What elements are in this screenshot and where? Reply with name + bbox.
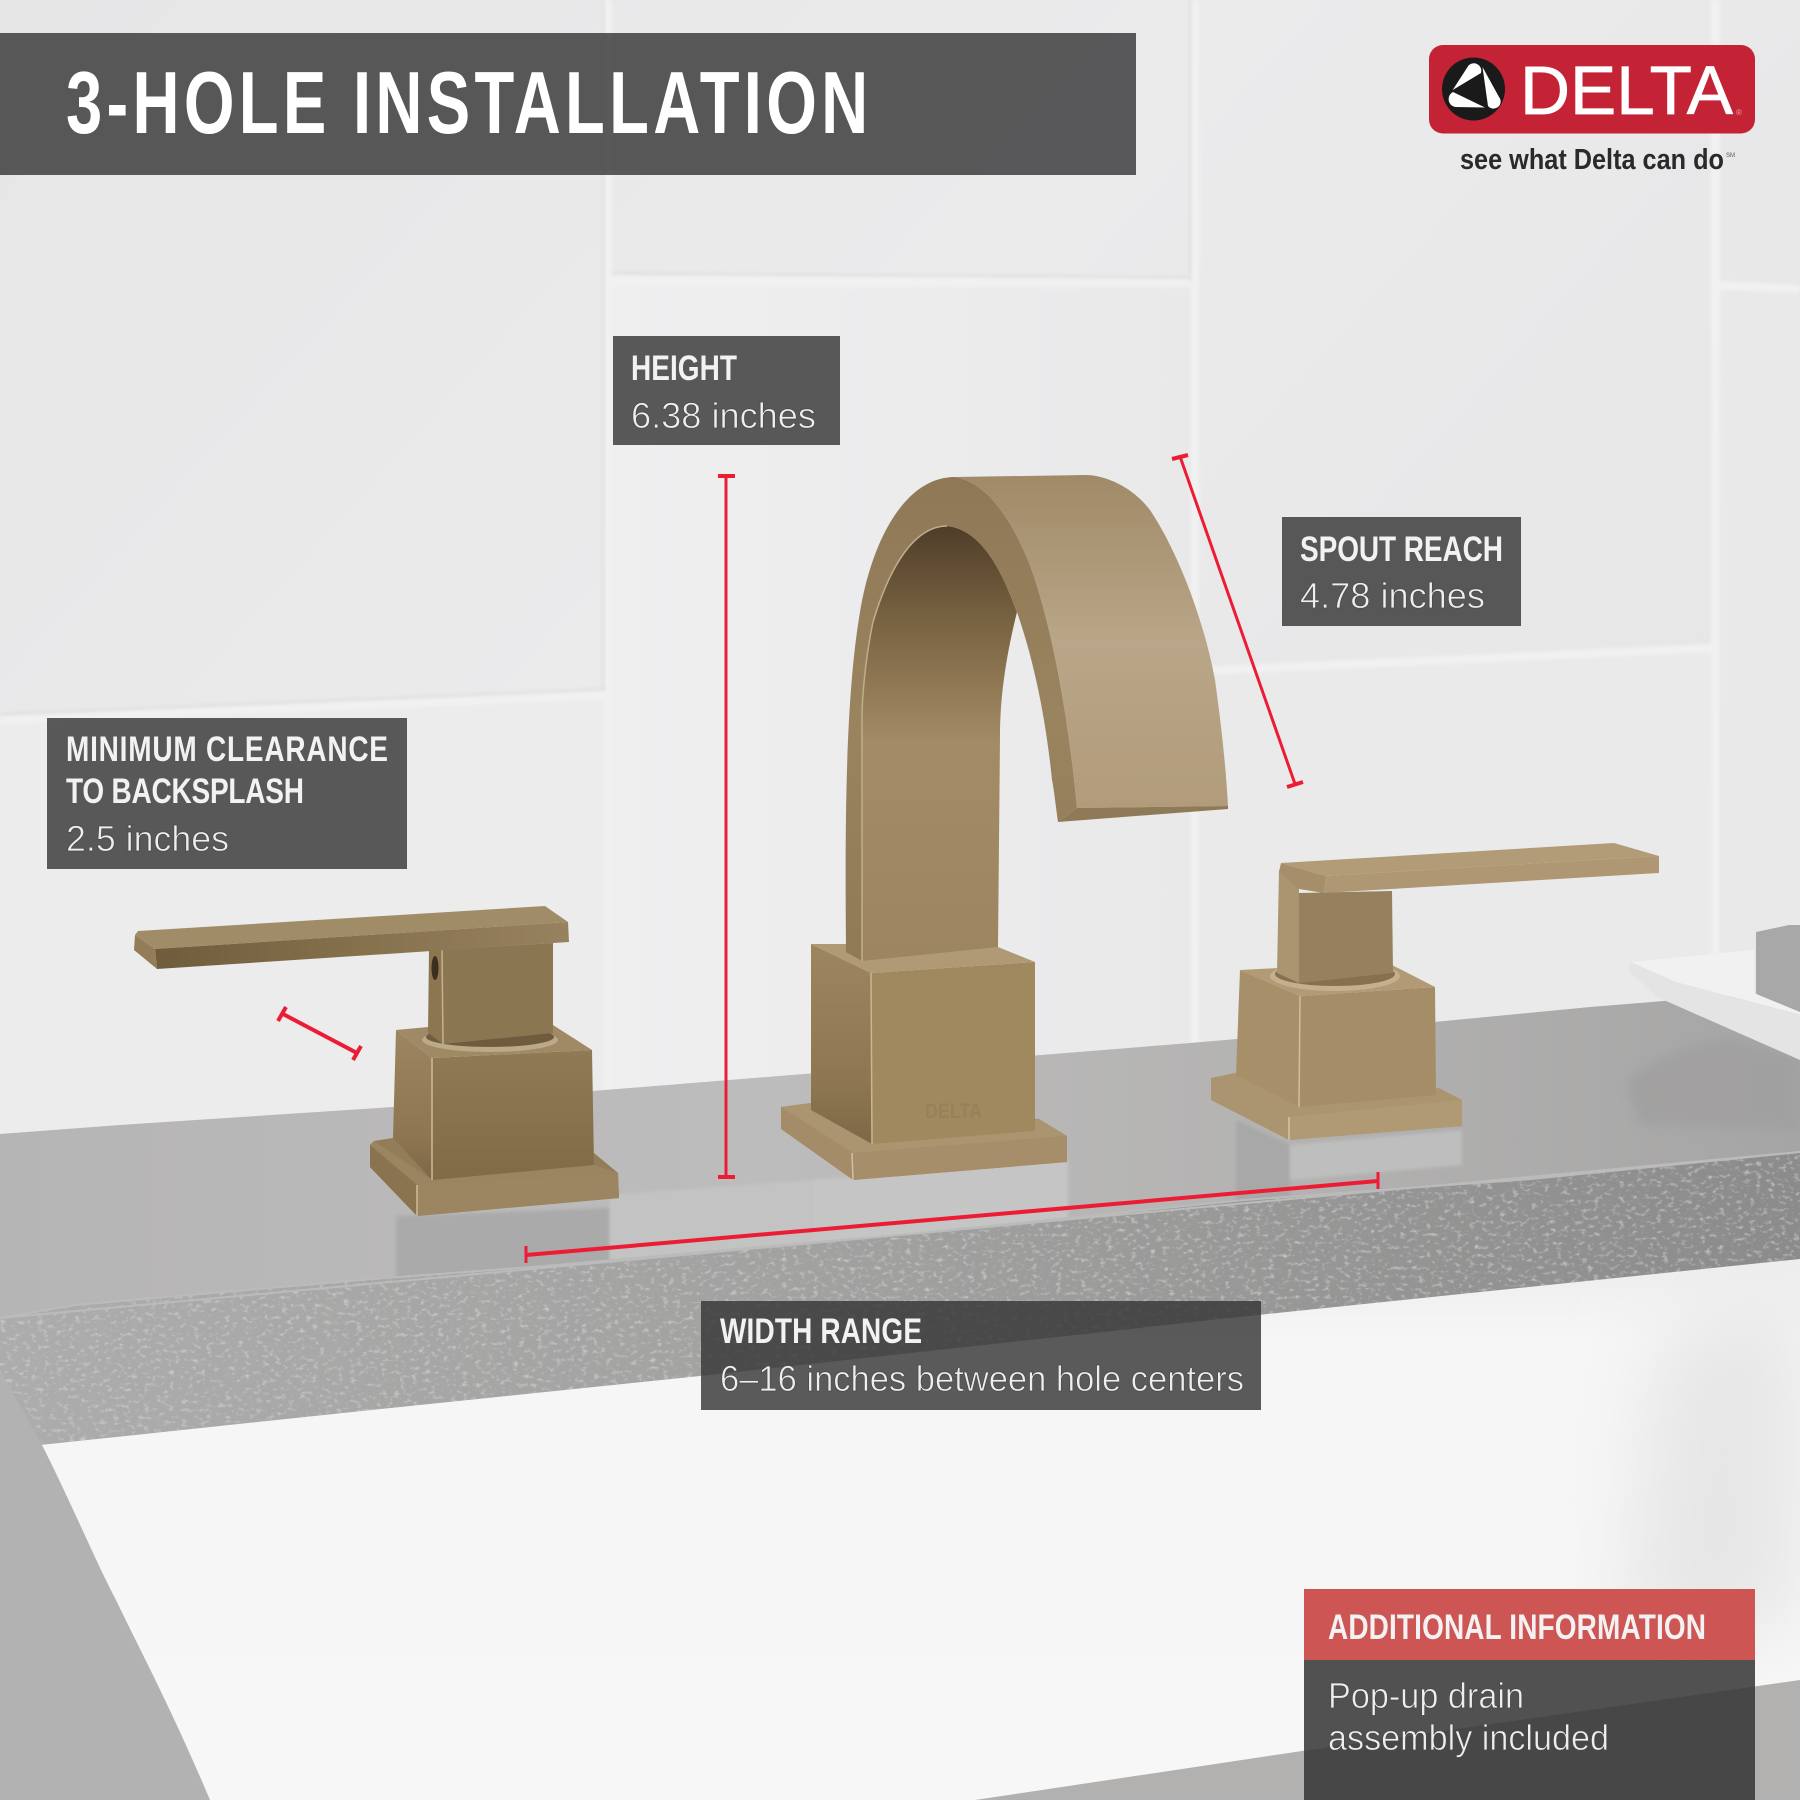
clearance heading line 2: TO BACKSPLASH [66,771,304,811]
spout tip [1058,806,1228,822]
left handle block [393,1025,594,1180]
right handle base plate [1211,1073,1462,1140]
additional information line 2: assembly included [1328,1717,1609,1758]
dimension line: minimum clearance [278,1007,361,1060]
dimension line: width range [526,1172,1378,1263]
tiled wall background [0,0,1800,1200]
spout front band [846,477,1077,961]
dimension line: height [718,476,735,1177]
additional information line 1: Pop-up drain [1328,1675,1524,1716]
clearance value: 2.5 inches [66,818,229,859]
center base block [811,944,1035,1144]
additional information body [1304,1660,1755,1800]
dimension line: spout reach [1172,455,1303,787]
countertop [0,990,1800,1318]
callout: width range [701,1301,1261,1410]
faucet logo stamp: DELTA [925,1100,982,1123]
panel: additional information [1304,1589,1755,1800]
additional information header [1304,1589,1755,1660]
right handle lever [1279,843,1659,893]
center base plate [781,1103,1067,1180]
title text: 3-HOLE INSTALLATION [66,55,868,152]
countertop front edge [0,1152,1800,1445]
left handle base plate [370,1138,619,1216]
spout reach heading: SPOUT REACH [1300,529,1503,569]
logo red badge [1429,45,1755,134]
spout reach value: 4.78 inches [1300,575,1485,616]
callout: minimum clearance [47,718,407,869]
clearance heading line 1: MINIMUM CLEARANCE [66,729,388,769]
registered mark: ® [1736,108,1742,117]
width range value: 6–16 inches between hole centers [720,1358,1244,1399]
spout top band [955,475,1228,808]
spout inner arch [862,526,1017,961]
right handle stem [1277,870,1393,983]
left handle lever [134,906,569,969]
right handle block [1236,961,1436,1107]
lower counter left and right [0,1370,1800,1800]
callout: height [613,336,840,445]
left handle stem [428,943,553,1044]
logo wordmark: DELTA [1520,52,1733,129]
logo tagline: see what Delta can do [1460,144,1724,176]
center spout faucet [781,475,1228,1180]
additional information heading: ADDITIONAL INFORMATION [1328,1607,1706,1647]
spout highlight edge [862,526,947,961]
callout: spout reach [1282,517,1521,626]
right handle [1211,843,1659,1140]
soap tray at right [1628,925,1800,1060]
sink basin [0,1240,1800,1800]
title banner [0,33,1136,175]
width range heading: WIDTH RANGE [720,1311,922,1351]
service mark: SM [1726,153,1735,159]
Delta logo [1429,45,1755,176]
height heading: HEIGHT [631,348,738,388]
left handle [134,906,619,1216]
logo emblem [1442,58,1505,120]
height value: 6.38 inches [631,395,816,436]
